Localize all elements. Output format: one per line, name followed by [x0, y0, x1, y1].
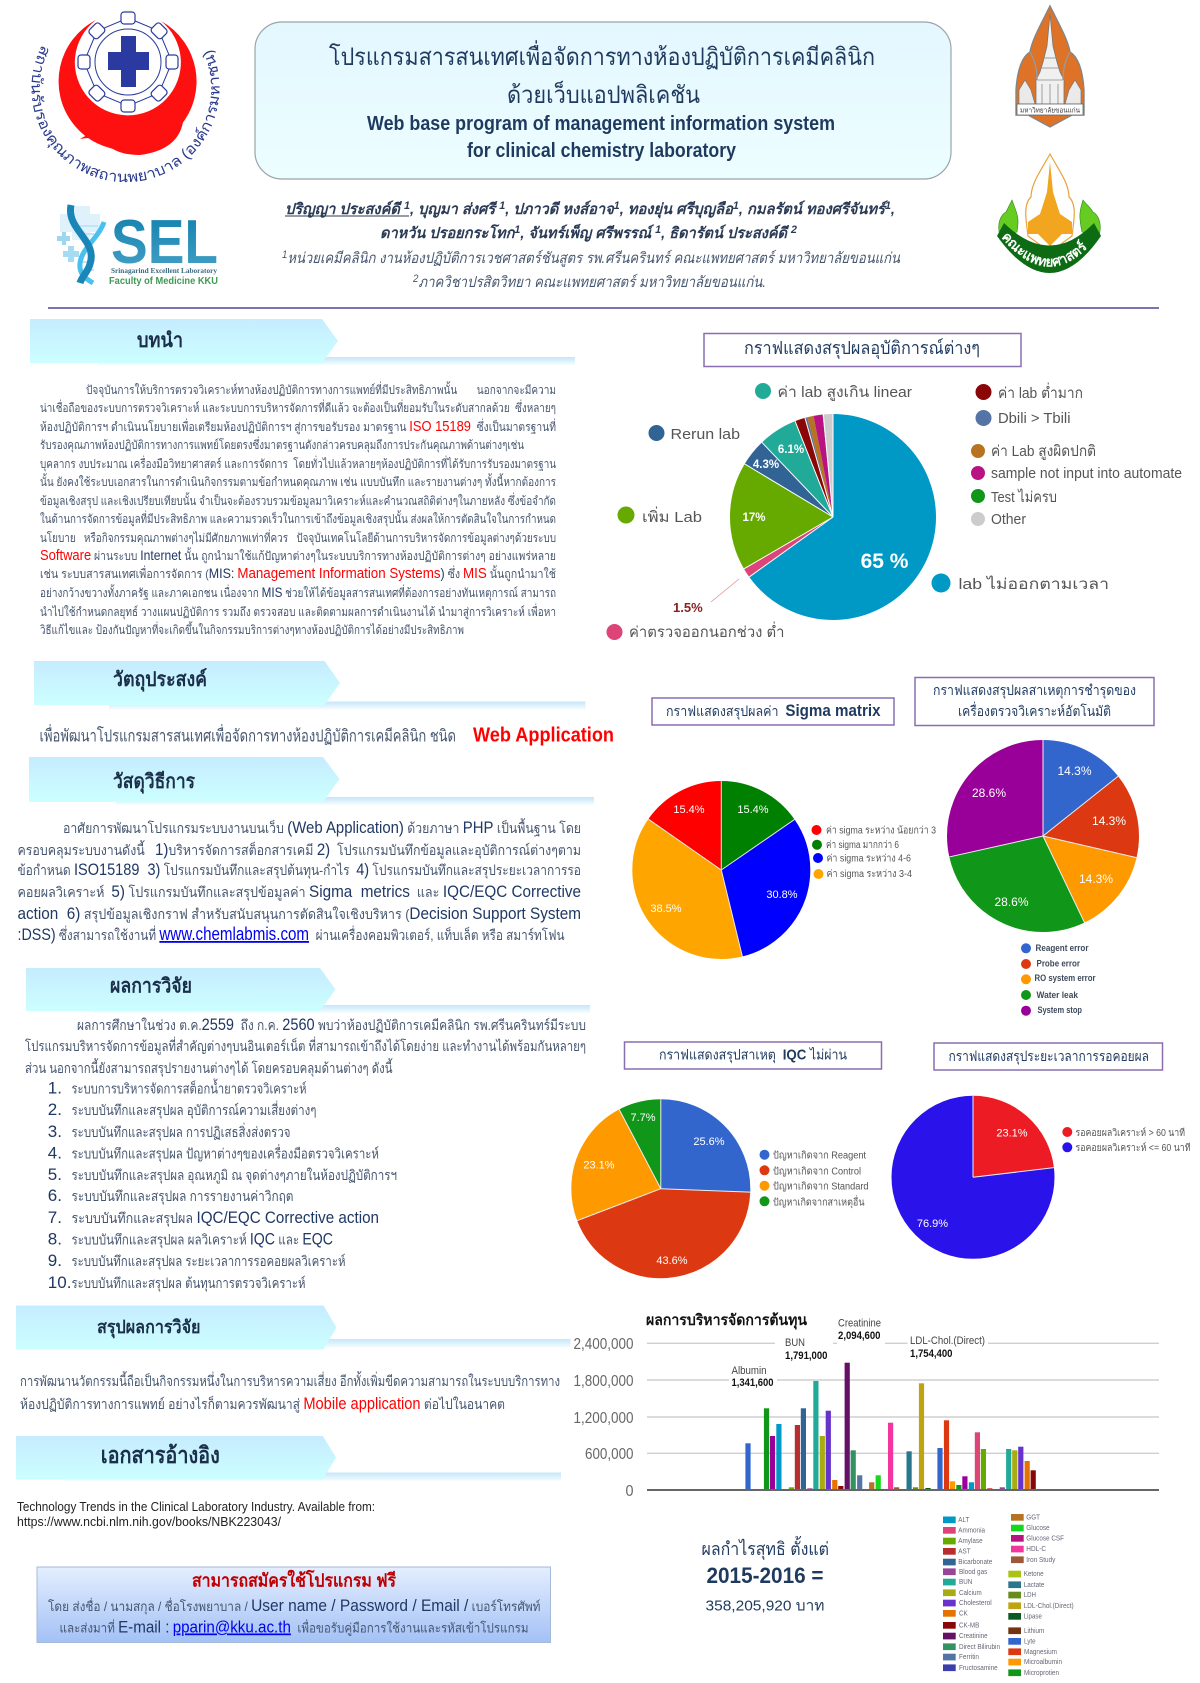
heading: results: ผลการวิจัย — [110, 976, 192, 998]
callout: Creatinine: 2,094,600 — [838, 1330, 880, 1342]
chart title: กราฟแสดงสรุปผลสาเหตุการชำรุดของ — [933, 682, 1136, 699]
pie chart: sigma — [648, 781, 798, 956]
legend: cost bar chart: LDH — [1024, 1592, 1036, 1599]
legend: cost bar chart: Fructosamine — [959, 1665, 998, 1672]
legend: cost bar chart: Cholesterol — [959, 1600, 992, 1607]
heading: conclusion: สรุปผลการวิจัย — [97, 1317, 200, 1339]
pie chart: sigma: 38.5% — [650, 903, 682, 915]
callout: BUN — [785, 1337, 828, 1362]
text block: introduction paragraph: ปัจจุบันการให้บริการตรวจวิเคราะห์ทางห้องปฏิบัติการทางการแพทย์ที่มีประสิทธิภาพนั้น นอกจากจะมีความ — [86, 381, 556, 398]
logo: Faculty of Medicine: คณะแพทยศาสตร์ — [1002, 234, 1086, 267]
authors and affiliations: 1 — [499, 200, 505, 212]
list: system modules: 1. — [48, 1078, 62, 1098]
authors and affiliations: 1 — [404, 200, 410, 212]
logo: SEL laboratory — [57, 205, 218, 287]
list: system modules: ระบบบันทึกและสรุปผล การรายงานค่าวิกฤต — [72, 1188, 294, 1205]
authors and affiliations: , ทองยุ่น ศรีบุญลือ — [619, 201, 734, 219]
heading: references: เอกสารอ้างอิง — [101, 1442, 220, 1468]
authors and affiliations: 1 — [733, 200, 739, 212]
legend: incidents — [606, 382, 1182, 641]
text block: references: Technology Trends in the Clinical Laboratory Industry. Available from: — [17, 1500, 375, 1514]
chart panel: sigma matrix — [648, 698, 936, 956]
legend: incidents: Other — [991, 511, 1026, 528]
text block: conclusion: ห้องปฏิบัติการทางการแพทย์ อย่างไรก็ตามควรพัฒนาสู่ Mobile application ต่อไปในอนาคต — [20, 1394, 505, 1413]
text block: introduction paragraph: เช่น ระบบสารสนเทศเพื่อการจัดการ (MIS: Management Information Systems) ซึ่ง MIS นั้นถูกนำมาใช้ — [40, 565, 556, 582]
title panel — [255, 22, 951, 179]
text block: references: https://www.ncbi.nlm.nih.gov/books/NBK223043/ — [17, 1515, 282, 1529]
text block: results intro: ผลการศึกษาในช่วง ต.ค.2559 ถึง ก.ค. 2560 พบว่าห้องปฏิบัติการเคมีคลินิก รพ.ศรีนครินทร์มีระบบ — [77, 1015, 586, 1034]
legend: cost bar chart: Lithium — [1024, 1628, 1044, 1635]
legend: incidents: ค่า Lab สูงผิดปกติ — [991, 443, 1096, 460]
chart panel: failed IQC causes — [577, 1042, 882, 1267]
logo: Khon Kaen University — [1016, 6, 1084, 127]
y axis labels — [574, 1336, 634, 1500]
pie chart: maintenance: 14.3% — [1092, 814, 1126, 828]
legend: cost bar chart: Glucose CSF — [1026, 1536, 1064, 1542]
legend: maintenance: RO system error — [1034, 973, 1096, 983]
authors and affiliations: ดาหวัน ปรอยกระโทก — [380, 225, 518, 242]
text block: introduction paragraph: อย่างกว้างขวางทั้งภาครัฐ และภาคเอกชน เนื่องจาก MIS ช่วยให้ได้ข้อมูลสารสนเทศที่ต้องการอย่างทันเหตุการณ์ สามารถ — [40, 584, 556, 601]
legend: IQC: ปัญหาเกิดจาก Standard — [773, 1182, 868, 1193]
legend: maintenance: Probe error — [1036, 958, 1080, 968]
legend: cost bar chart: Amylase — [958, 1538, 983, 1545]
list: system modules: ระบบบันทึกและสรุปผล ผลวิเคราะห์ IQC และ EQC — [72, 1230, 333, 1248]
heading: results — [26, 968, 590, 1013]
heading: methods: วัสดุวิธีการ — [113, 770, 195, 794]
legend: cost bar chart: LDL-Chol.(Direct) — [1024, 1603, 1074, 1610]
text block: introduction paragraph: วิธีแก้ไขและ ป้องกันปัญหาที่จะเกิดขึ้นในกิจกรรมบริการต่างๆทางห้องปฏิบัติการได้อย่างมีประสิทธิภาพ — [40, 621, 464, 637]
callout: free registration: และส่งมาที่ E-mail : pparin@kku.ac.th เพื่อขอรับคู่มือการใช้งานและรหัสเข้าโปรแกรม — [60, 1618, 528, 1636]
authors and affiliations: 2 — [412, 273, 418, 285]
pie chart: sigma: 15.4% — [737, 804, 769, 816]
pie chart: maintenance — [949, 740, 1137, 923]
text block: objective: เพื่อพัฒนาโปรแกรมสารสนเทศเพื่อจัดการทางห้องปฏิบัติการเคมีคลินิก ชนิด — [40, 724, 456, 746]
pie chart: sigma: 15.4% — [673, 804, 705, 816]
legend: cost bar chart: GGT — [1026, 1514, 1041, 1522]
authors and affiliations: , ปภาวดี หงส์อาจ — [504, 200, 615, 218]
legend: cost bar chart: HDL-C — [1026, 1546, 1046, 1553]
authors and affiliations: หน่วยเคมีคลินิก งานห้องปฏิบัติการเวชศาสตร์ชันสูตร รพ.ศรีนครินทร์ คณะแพทยศาสตร์ มหาวิทยาลัยขอนแก่น — [287, 249, 901, 267]
callout: BUN: 1,791,000 — [785, 1350, 828, 1362]
pie chart: IQC: 7.7% — [630, 1112, 656, 1124]
authors and affiliations: , กมลรัตน์ ทองศรีจันทร์ — [738, 200, 889, 218]
chart title — [915, 678, 1154, 726]
legend: cost bar chart: Ammonia — [958, 1528, 985, 1534]
heading: conclusion — [16, 1306, 570, 1350]
chart title — [624, 1042, 882, 1069]
Thai title — [329, 40, 875, 109]
callout: LDL-Chol: LDL-Chol.(Direct) — [910, 1335, 985, 1347]
callout: Albumin — [732, 1365, 774, 1389]
stat: net profit: 358,205,920 บาท — [706, 1598, 824, 1614]
list: system modules: ระบบบันทึกและสรุปผล ปัญหาต่างๆของเครื่องมือตรวจวิเคราะห์ — [72, 1144, 379, 1162]
pie chart: incidents: 17% — [742, 512, 766, 524]
chart title: กราฟแสดงสรุประยะเวลาการรอคอยผล — [948, 1048, 1149, 1065]
text block: introduction paragraph: น่าเชื่อถือของระบบการตรวจวิเคราะห์ และระบบการบริหารจัดการที่ดีแล้ว จะต้องเป็นที่ยอมรับในระดับสากลด้วย ซึ่งหลายๆ — [40, 399, 556, 415]
logo: healthcare accreditation institute: สถาบันรับรองคุณภาพสถานพยาบาล (องค์การมหาชน) — [32, 46, 220, 182]
stat: net profit: 2015-2016 = — [706, 1563, 824, 1588]
list: system modules: 9. — [48, 1251, 62, 1270]
pie chart: incidents: 65 % — [861, 550, 909, 573]
text block: objective: Web Application — [473, 724, 614, 746]
legend: incidents: sample not input into automate — [991, 465, 1182, 482]
bar chart: cost management — [574, 1311, 1159, 1500]
pie chart: sigma: 30.8% — [766, 889, 798, 901]
text block: methods: ครอบคลุมระบบงานดังนี้ 1)บริหารจัดการสต็อกสารเคมี 2) โปรแกรมบันทึกข้อมูลและอุบัติการณ์ต่างๆตาม — [18, 840, 581, 859]
authors and affiliations: , ธิดารัตน์ ประสงค์ดี — [660, 224, 791, 242]
legend: cost bar chart: Direct Bilirubin — [959, 1644, 1000, 1651]
legend: turnaround: รอคอยผลวิเคราะห์ > 60 นาที — [1076, 1127, 1185, 1139]
authors and affiliations: 1 — [282, 249, 287, 261]
chart title: กราฟแสดงสรุปผลอุบัติการณ์ต่างๆ — [744, 338, 980, 359]
pie chart: maintenance: 14.3% — [1057, 764, 1092, 778]
authors and affiliations — [282, 200, 901, 291]
legend: maintenance — [1021, 943, 1096, 1016]
pie chart: incidents: 1.5% — [673, 600, 703, 615]
section: results — [25, 968, 590, 1292]
section: introduction — [30, 319, 575, 637]
list: system modules: ระบบการบริหารจัดการสต็อกน้ำยาตรวจวิเคราะห์ — [72, 1078, 306, 1096]
legend: cost bar chart — [943, 1514, 1074, 1677]
y axis labels: 0 — [626, 1483, 634, 1500]
text block: results intro: ส่วน นอกจากนี้ยังสามารถสรุปรายงานต่างๆได้ โดยครอบคลุมด้านต่างๆ ดังนี้ — [25, 1058, 393, 1077]
chart title: เครื่องตรวจวิเคราะห์อัตโนมัติ — [958, 702, 1111, 719]
list: system modules: 7. — [48, 1208, 62, 1227]
list: system modules: 2. — [48, 1100, 62, 1119]
text block: methods: action 6) สรุปข้อมูลเชิงกราฟ สำหรับสนับสนุนการตัดสินใจเชิงบริหาร (Decision Support System — [18, 904, 581, 923]
legend: cost bar chart: Creatinine — [959, 1633, 988, 1640]
pie chart: maintenance: 28.6% — [994, 895, 1029, 909]
list: system modules: ระบบบันทึกและสรุปผล อุบัติการณ์ความเสี่ยงต่างๆ — [72, 1101, 316, 1119]
authors and affiliations: , — [890, 201, 895, 218]
pie chart: turnaround: 76.9% — [917, 1218, 948, 1230]
logo: SEL laboratory: Srinagarind Excellent Laboratory — [111, 267, 218, 275]
pie chart: IQC — [577, 1099, 750, 1267]
authors and affiliations: ปริญญา ประสงค์ดี — [285, 201, 403, 218]
legend: cost bar chart: Bicarbonate — [958, 1559, 992, 1566]
legend: cost bar chart: ALT — [958, 1517, 970, 1524]
legend: cost bar chart: Ferritin — [959, 1654, 979, 1661]
callout: Albumin: 1,341,600 — [732, 1377, 774, 1389]
text block: methods: :DSS) ซึ่งสามารถใช้งานที่ www.chemlabmis.com ผ่านเครื่องคอมพิวเตอร์, แท็บเล็ต หรือ สมาร์ทโฟน — [18, 924, 565, 944]
text block: introduction paragraph: นโยบาย หรือกิจกรรมคุณภาพต่างๆไม่มีศักยภาพเท่าที่ควร ปัจจุบันเทคโนโลยีด้านการบริหารจัดการข้อมูลต่างๆด้วยระบบ — [40, 529, 556, 546]
chart title — [934, 1043, 1162, 1070]
text block: introduction paragraph — [40, 381, 556, 637]
list: system modules: 8. — [48, 1230, 62, 1248]
callout: BUN: BUN — [785, 1337, 805, 1349]
y axis labels: 2,400,000 — [574, 1336, 634, 1353]
legend: turnaround — [1062, 1127, 1190, 1154]
legend: cost bar chart: Lyte — [1024, 1638, 1036, 1646]
authors and affiliations: 1 — [655, 224, 661, 236]
callout: Albumin: Albumin — [732, 1365, 766, 1377]
legend: maintenance: System stop — [1038, 1005, 1082, 1015]
legend: cost bar chart: Ketone — [1024, 1571, 1044, 1578]
legend: cost bar chart: BUN — [959, 1579, 972, 1586]
heading: methods — [29, 757, 594, 805]
chart panel: analyzer maintenance causes — [915, 678, 1154, 1016]
stat: net profit: ผลกำไรสุทธิ ตั้งแต่ — [702, 1536, 829, 1560]
list: system modules: ระบบบันทึกและสรุปผล อุณหภูมิ ณ จุดต่างๆภายในห้องปฏิบัติการฯ — [72, 1167, 397, 1184]
pie chart: incidents — [673, 414, 909, 615]
Thai title: โปรแกรมสารสนเทศเพื่อจัดการทางห้องปฏิบัติการเคมีคลินิก — [329, 40, 875, 71]
legend: incidents: lab ไม่ออกตามเวลา — [958, 575, 1109, 593]
text block: conclusion: การพัฒนานวัตกรรมนี้ถือเป็นกิจกรรมหนึ่งในการบริหารความเสี่ยง อีกทั้งเพิ่มขีดความสามารถในระบบบริการทาง — [20, 1371, 560, 1389]
text block: results intro — [25, 1015, 586, 1077]
logo: Khon Kaen University: มหาวิทยาลัยขอนแก่น — [1020, 106, 1080, 114]
text block: introduction paragraph: นำไปใช้กำหนดกลยุทธ์ วางแผนปฏิบัติการ รวมถึง ตรวจสอบ และติดตามผลการดำเนินงานได้ นำมาสู่การวิเคราะห์ เพื่อหา — [40, 603, 556, 620]
authors and affiliations: , บุญมา ส่งศรี — [409, 201, 499, 219]
legend: IQC: ปัญหาเกิดจาก Reagent — [773, 1151, 866, 1162]
legend: incidents: Dbili > Tbili — [998, 410, 1070, 427]
heading: objective — [34, 661, 586, 710]
pie chart: IQC: 25.6% — [693, 1136, 725, 1148]
legend: cost bar chart: CK — [959, 1610, 968, 1618]
legend: cost bar chart: Microalbumin — [1024, 1659, 1062, 1666]
text block: methods: ข้อกำหนด ISO15189 3) โปรแกรมบันทึกและสรุปต้นทุน-กำไร 4) โปรแกรมบันทึกและสรุประยะเวลาการรอ — [18, 860, 581, 879]
text block: methods: อาศัยการพัฒนาโปรแกรมระบบงานบนเว็บ (Web Application) ด้วยภาษา PHP เป็นพื้นฐาน โดย — [63, 818, 581, 837]
legend: incidents: เพิ่ม Lab — [642, 506, 702, 526]
text block: introduction paragraph: ข้อมูลเชิงสรุป และเชิงเปรียบเทียบนั้น จำเป็นจะต้องรวบรวมข้อมูลมาวิเคราะห์และคำนวณสถิติต่างๆในภายหลัง ซึ่งข้อจำกัด — [40, 492, 556, 509]
legend: IQC: ปัญหาเกิดจาก Control — [773, 1166, 861, 1177]
list: system modules: 4. — [48, 1144, 62, 1162]
list: system modules: 6. — [48, 1186, 62, 1205]
text block: introduction paragraph: ในด้านการจัดการข้อมูลที่มีประสิทธิภาพ และความรวดเร็วในการเข้าถึงข้อมูลเชิงสรุปนั้น ส่งผลให้การตัดสินใจในการกำหนด — [40, 510, 556, 527]
chart title — [704, 334, 1021, 366]
legend: cost bar chart: Microprotien — [1024, 1670, 1059, 1677]
list: system modules — [48, 1078, 397, 1292]
legend: IQC — [760, 1150, 868, 1208]
authors and affiliations: 1 — [514, 224, 520, 236]
stat: net profit — [702, 1536, 829, 1614]
y axis labels: 1,200,000 — [574, 1410, 634, 1427]
pie chart: turnaround — [917, 1096, 1054, 1230]
legend: cost bar chart: Magnesium — [1024, 1649, 1057, 1656]
legend: cost bar chart: Glucose — [1026, 1525, 1050, 1532]
chart panel: turnaround time — [917, 1043, 1190, 1230]
legend: sigma: ค่า sigma ระหว่าง 4-6 — [826, 854, 911, 865]
logo: Faculty of Medicine — [997, 152, 1101, 273]
text block: introduction paragraph: นั้น ยังคงใช้ระบบเอกสารในการดำเนินกิจกรรมตามข้อกำหนดคุณภาพ เช่น แบบบันทึก และรายงานต่างๆ ทั้งนี้หากต้องการ — [40, 473, 556, 490]
legend: cost bar chart: Iron Study — [1026, 1557, 1056, 1564]
chart title: กราฟแสดงสรุปผลค่า Sigma matrix — [666, 701, 881, 720]
text block: methods — [18, 818, 581, 944]
pie chart: IQC: 23.1% — [583, 1160, 615, 1172]
callout: free registration: สามารถสมัครใช้โปรแกรม ฟรี — [192, 1570, 396, 1590]
section: materials and methods — [18, 757, 594, 944]
section: conclusion — [16, 1306, 570, 1413]
heading: references — [16, 1436, 561, 1481]
text block: references — [17, 1500, 375, 1529]
list: system modules: 10. — [48, 1273, 71, 1292]
chart title: ผลการบริหารจัดการต้นทุน — [646, 1311, 808, 1330]
legend: cost bar chart: AST — [958, 1548, 971, 1556]
list: system modules: ระบบบันทึกและสรุปผล ต้นทุนการตรวจวิเคราะห์ — [72, 1275, 306, 1292]
logo: SEL laboratory: Faculty of Medicine KKU — [109, 276, 218, 287]
callout: Creatinine: Creatinine — [838, 1318, 881, 1330]
legend: incidents: ค่า lab ต่ำมาก — [998, 382, 1083, 402]
callout: free registration — [37, 1567, 550, 1642]
legend: sigma: ค่า sigma ระหว่าง น้อยกว่า 3 — [826, 824, 936, 836]
chart panel: incident summary — [606, 334, 1182, 641]
Thai title: ด้วยเว็บแอปพลิเคชัน — [507, 80, 700, 109]
legend: maintenance: Reagent error — [1036, 943, 1089, 953]
English title: for clinical chemistry laboratory — [467, 140, 737, 162]
section: objective — [34, 661, 614, 746]
section: references — [16, 1436, 561, 1529]
list: system modules: ระบบบันทึกและสรุปผล ระยะเวลาการรอคอยผลวิเคราะห์ — [72, 1253, 346, 1270]
y axis labels: 1,800,000 — [574, 1373, 634, 1390]
text block: introduction paragraph: ห้องปฏิบัติการฯ ดำเนินนโยบายเพื่อเตรียมห้องปฏิบัติการฯ สู่การขอรับรอง มาตรฐาน ISO 15189 ซึ่งเป็นมาตรฐานที่ — [40, 418, 556, 435]
authors and affiliations: , จันทร์เพ็ญ ศรีพรรณ์ — [519, 223, 655, 242]
callout: free registration: โดย ส่งชื่อ / นามสกุล / ชื่อโรงพยาบาล / User name / Password / Email / เบอร์โทรศัพท์ — [48, 1596, 540, 1615]
callout: LDL-Chol: 1,754,400 — [910, 1348, 952, 1360]
list: system modules: ระบบบันทึกและสรุปผล IQC/EQC Corrective action — [72, 1208, 379, 1227]
chart title — [652, 698, 894, 725]
legend: cost bar chart: Calcium — [959, 1590, 982, 1597]
text block: methods: คอยผลวิเคราะห์ 5) โปรแกรมบันทึกและสรุปข้อมูลค่า Sigma metrics และ IQC/EQC Corrective — [18, 882, 581, 901]
y axis labels: 600,000 — [585, 1446, 634, 1463]
chart title: กราฟแสดงสรุปสาเหตุ IQC ไม่ผ่าน — [659, 1046, 847, 1064]
legend: incidents: ค่า lab สูงเกิน linear — [778, 384, 912, 401]
authors and affiliations: 1 — [885, 200, 891, 212]
legend: IQC: ปัญหาเกิดจากสาเหตุอื่น — [773, 1194, 865, 1208]
bars — [745, 1363, 1036, 1490]
pie chart: turnaround: 23.1% — [996, 1128, 1028, 1140]
heading: introduction: บทนำ — [137, 330, 183, 352]
text block: results intro: โปรแกรมบริหารจัดการข้อมูลที่สำคัญต่างๆบนอินเตอร์เน็ต ที่สามารถเข้าถึงได้โดยง่าย และทำงานได้พร้อมกันหลายๆ — [25, 1037, 586, 1055]
heading: introduction — [30, 319, 575, 365]
heading: objective: วัตถุประสงค์ — [113, 668, 207, 692]
legend: sigma: ค่า sigma มากกว่า 6 — [826, 840, 899, 851]
legend: cost bar chart: Lactate — [1024, 1582, 1044, 1589]
English title — [367, 113, 835, 162]
legend: incidents: Test ไม่ครบ — [991, 488, 1057, 506]
legend: maintenance: Water leak — [1036, 990, 1079, 1000]
text block: introduction paragraph: บุคลากร งบประมาณ เครื่องมือวิทยาศาสตร์ และการจัดการ โดยทั่วไปแล้วหลายๆห้องปฏิบัติการที่ได้รับการรับรองมาตรฐาน — [40, 455, 556, 472]
legend: cost bar chart: Lipase — [1024, 1614, 1042, 1620]
English title: Web base program of management information system — [367, 113, 835, 135]
authors and affiliations: ภาควิชาปรสิตวิทยา คณะแพทยศาสตร์ มหาวิทยาลัยขอนแก่น. — [418, 273, 766, 291]
pie chart: IQC: 43.6% — [656, 1255, 688, 1267]
legend: incidents: Rerun lab — [670, 426, 740, 443]
legend: sigma — [812, 824, 936, 880]
logo: SEL laboratory: SEL — [111, 208, 218, 277]
legend: incidents: ค่าตรวจออกนอกช่วง ต่ำ — [629, 621, 784, 641]
pie chart: maintenance: 28.6% — [972, 786, 1006, 800]
text block: introduction paragraph: รับรองคุณภาพห้องปฏิบัติการทางการแพทย์โดยตรงซึ่งมาตรฐานดังกล่าวครบคลุมถึงการประกันคุณภาพด้านต่างๆเช่น — [40, 436, 524, 453]
legend: cost bar chart: Blood gas — [959, 1569, 988, 1576]
pie chart: maintenance: 14.3% — [1079, 872, 1113, 886]
authors and affiliations: 1 — [614, 200, 620, 212]
authors and affiliations: 2 — [790, 224, 797, 236]
pie chart: incidents: 4.3% — [753, 459, 779, 471]
legend: sigma: ค่า sigma ระหว่าง 3-4 — [826, 869, 912, 880]
list: system modules: ระบบบันทึกและสรุปผล การปฏิเสธสิ่งส่งตรวจ — [72, 1123, 290, 1141]
legend: cost bar chart: CK-MB — [959, 1622, 980, 1630]
list: system modules: 3. — [48, 1122, 62, 1141]
text block: conclusion — [20, 1371, 560, 1413]
pie chart: incidents: 6.1% — [778, 444, 804, 456]
callout: Creatinine — [838, 1318, 881, 1342]
list: system modules: 5. — [48, 1165, 62, 1184]
text block: introduction paragraph: Software ผ่านระบบ Internet นั้น ถูกนำมาใช้แก้ปัญหาต่างๆในระบบบริการทางห้องปฏิบัติการต่างๆ อย่างแพร่หลาย — [40, 547, 556, 564]
callout: LDL-Chol — [910, 1335, 985, 1360]
